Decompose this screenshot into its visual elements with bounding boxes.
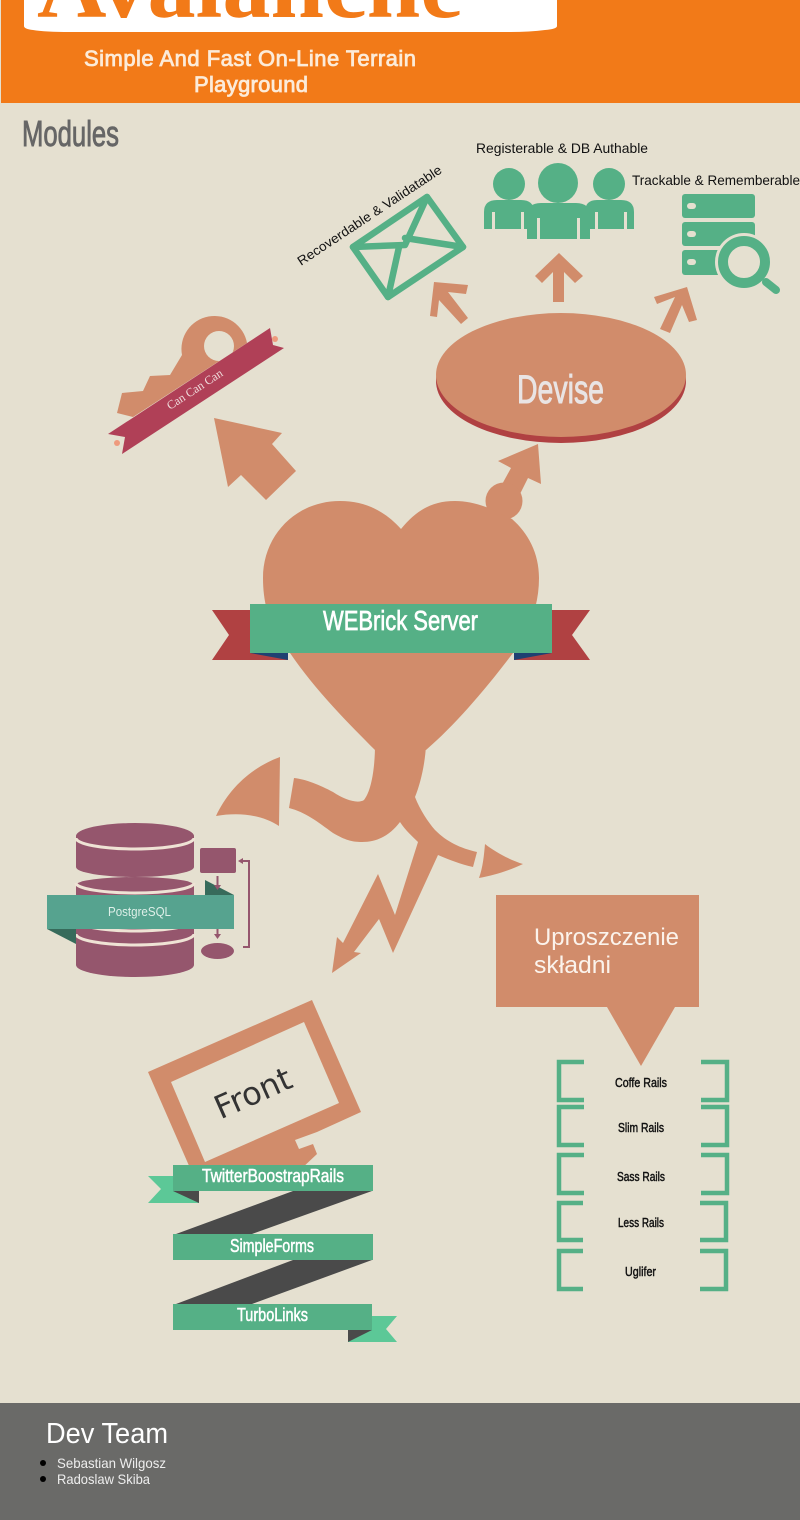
team list: Radoslaw Skiba — [57, 1471, 150, 1487]
webrick text: WEBrick Server — [323, 605, 478, 636]
gem names: Coffe Rails — [615, 1075, 667, 1090]
heading: modules: Modules — [22, 113, 119, 154]
icon: server search — [682, 194, 776, 291]
front text: Front — [208, 1059, 298, 1127]
ribbon labels — [202, 1166, 344, 1325]
flowchart icon — [200, 848, 249, 959]
callout: uproszczenie — [496, 895, 699, 1066]
label: recoverable: Recoverdable & Validatable — [294, 162, 444, 269]
subtitle: Simple And Fast On-Line Terrain — [84, 46, 416, 71]
gem names: Uglifer — [625, 1264, 657, 1279]
footer panel — [0, 1403, 800, 1520]
leg and lightning arrows — [289, 745, 477, 973]
ribbon stack: front gems — [148, 1165, 397, 1342]
ribbon text: Can Can Can — [164, 366, 225, 413]
heart — [263, 501, 539, 750]
gem names: Less Rails — [618, 1215, 664, 1230]
arrow: to devise — [486, 444, 541, 520]
arrow: to envelope — [430, 282, 468, 324]
footer heading: Dev Team — [46, 1418, 168, 1450]
postgresql text: PostgreSQL — [108, 904, 171, 919]
team list — [40, 1455, 166, 1487]
callout: uproszczenie: składni — [534, 952, 611, 979]
icon: key with ribbon — [108, 316, 284, 454]
can can can ribbon — [108, 328, 284, 454]
callout: uproszczenie: Uproszczenie — [534, 924, 679, 951]
webrick ribbon — [212, 604, 590, 660]
database icon — [76, 823, 194, 977]
gem names — [615, 1075, 667, 1279]
ribbon labels: TwitterBoostrapRails — [202, 1166, 344, 1186]
header banner — [1, 0, 800, 103]
postgresql banner — [47, 895, 234, 944]
node: devise — [436, 313, 686, 443]
subtitle: Playground — [194, 72, 308, 97]
list: syntax gems — [559, 1062, 727, 1289]
ribbon labels: SimpleForms — [230, 1236, 314, 1256]
icon: envelope — [353, 197, 463, 297]
arrow: to people — [535, 253, 583, 302]
icon: people — [484, 163, 634, 239]
subtitle — [84, 46, 416, 97]
gem names: Sass Rails — [617, 1169, 665, 1184]
icon: monitor — [148, 1000, 361, 1184]
label: registerable: Registerable & DB Authable — [476, 140, 648, 156]
arrow: to server — [654, 287, 697, 333]
gem names: Slim Rails — [618, 1120, 664, 1135]
banner fold: top right — [205, 880, 234, 895]
arrow tip: left — [216, 757, 280, 826]
arrow tip: right — [479, 844, 523, 878]
team list: Sebastian Wilgosz — [57, 1455, 166, 1471]
ribbon labels: TurboLinks — [237, 1305, 308, 1325]
arrow: to key — [214, 418, 296, 500]
devise text: Devise — [517, 368, 604, 412]
